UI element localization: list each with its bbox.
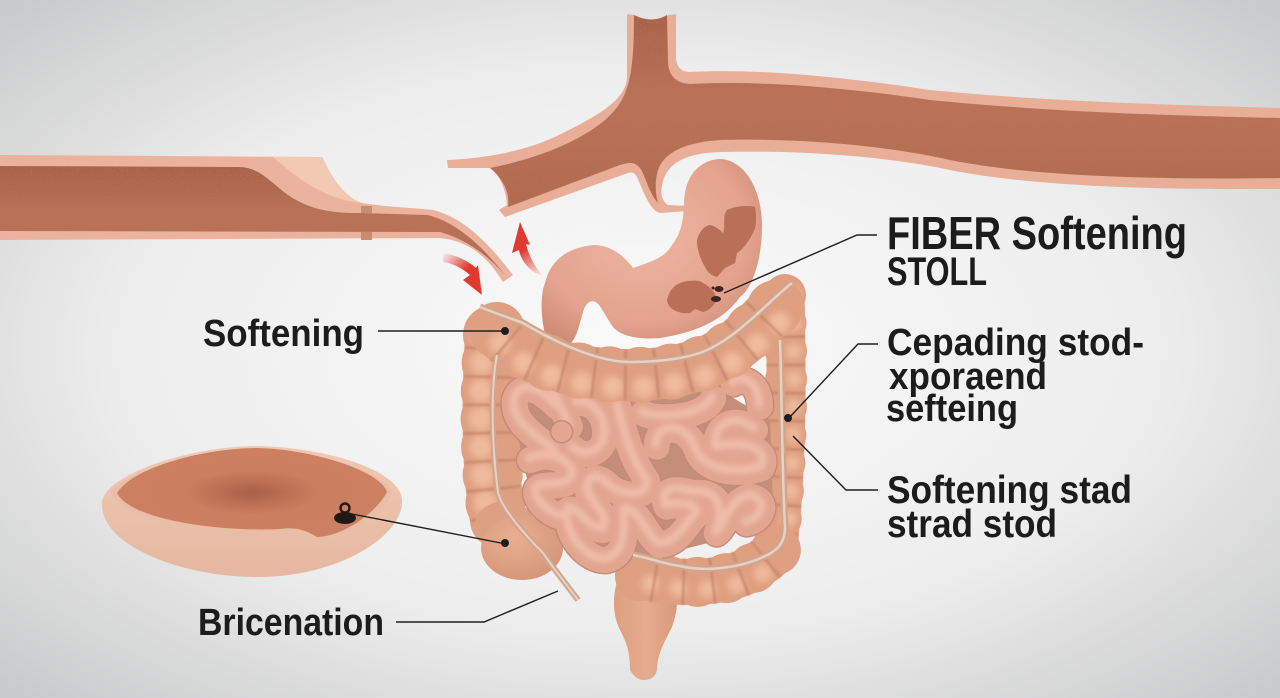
- stomach dark spot: [711, 286, 724, 302]
- disc rim: [110, 450, 392, 541]
- label: Softening stad strad stod: Softening stad: [887, 469, 1132, 512]
- disc cross-section: [102, 446, 402, 577]
- longitudinal bands: [480, 283, 792, 600]
- icon: red arrow left: [443, 253, 482, 295]
- upper right tube: [447, 14, 1280, 217]
- rectum: [614, 560, 677, 680]
- label: Cepading stod-xporaend sefteing: xporaend: [889, 356, 1047, 398]
- label: Cepading stod-xporaend sefteing: sefteing: [886, 388, 1018, 430]
- descending colon: [778, 295, 794, 545]
- small intestine: [510, 379, 773, 560]
- stomach cavity lower: [667, 281, 717, 313]
- label: Softening stad strad stod: [887, 469, 1132, 546]
- label: Bricenation: Bricenation: [198, 602, 384, 644]
- label: Softening stad strad stod: strad stod: [887, 503, 1057, 546]
- label: Cepading stod-xporaend sefteing: Cepading stod-: [887, 322, 1144, 364]
- sigmoid colon: [640, 545, 782, 589]
- disc dark spot: [334, 504, 356, 524]
- disc outer wall: [102, 446, 402, 577]
- left tube: [0, 155, 513, 282]
- label: FIBER Softening STOLL: FIBER Softening: [887, 207, 1187, 259]
- leader lines: [352, 235, 878, 622]
- icon: red arrow right: [512, 222, 544, 276]
- stomach: [542, 159, 762, 345]
- label: Cepading stod-xporaend sefteing: [886, 322, 1144, 430]
- ascending colon: [481, 335, 498, 520]
- disc top surface: [117, 448, 387, 537]
- label: FIBER Softening STOLL: [887, 207, 1187, 294]
- label: Softening left: Softening: [203, 313, 364, 355]
- transverse colon: [497, 305, 786, 387]
- stomach cavity upper: [697, 206, 756, 277]
- cecum: [475, 501, 563, 580]
- label: FIBER Softening STOLL: STOLL: [887, 250, 987, 294]
- leader dots: [501, 327, 792, 547]
